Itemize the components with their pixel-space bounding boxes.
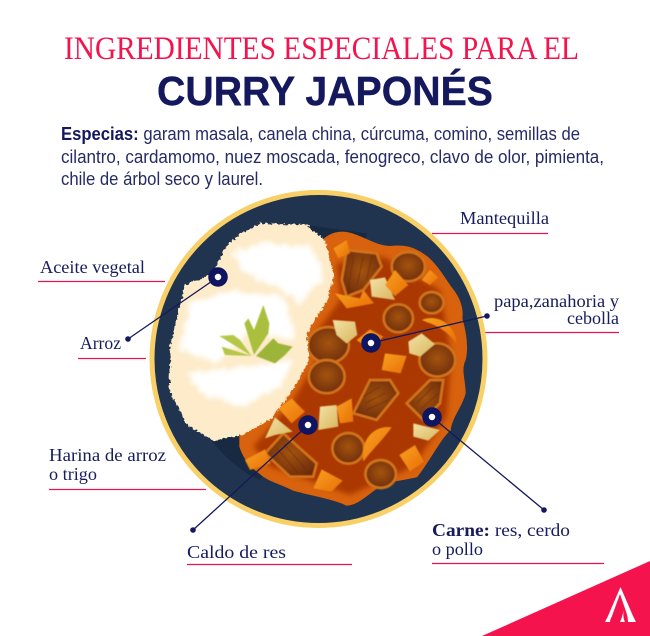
carrot pieces [245,240,457,492]
corner triangle [482,561,650,636]
title line 1: INGREDIENTES ESPECIALES PARA EL [64,31,579,67]
spices text block: cilantro, cardamomo, nuez moscada, fenogreco, clavo de olor, pimienta, [61,147,604,167]
callout marker: carne [426,410,547,513]
label: papa, zanahoria y cebolla: cebolla [567,308,619,328]
curry and rice, drawn in a 3x local grid [169,223,466,505]
label: harina: o trigo [49,464,97,484]
label: aceite vegetal: Aceite vegetal [40,257,145,277]
potato pieces [265,277,440,441]
meat chunks [265,250,455,488]
label: papa, zanahoria y cebolla: papa,zanahoria y [494,291,619,311]
title line 2: CURRY JAPONÉS [157,68,493,114]
meat ribs [277,257,438,473]
icon: parsley garnish [219,305,293,363]
curry details [245,240,457,492]
label: carne: o pollo [432,539,483,559]
icon: logo [605,587,636,622]
label: arroz: Arroz [80,333,121,353]
label lines [38,234,619,564]
spices text block: chile de árbol seco y laurel. [61,169,263,189]
plate shadow [212,225,367,480]
label: harina: Harina de arroz [49,445,166,465]
plate rim [152,192,485,526]
dark sauce [253,257,452,495]
label: carne: Carne: res, cerdo [432,520,570,540]
label: papa, zanahoria y cebolla [494,291,619,328]
plate illustration [152,192,485,526]
label: carne [432,520,570,559]
label: caldo de res: Caldo de res [187,542,286,562]
callout marker: papa [364,313,490,350]
callout marker: caldo [190,418,314,533]
curry sauce [240,232,466,505]
label: harina [49,445,166,484]
callout marker: arroz [125,270,224,342]
spices text block [61,124,604,189]
rice mound [169,223,334,441]
label: mantequilla: Mantequilla [460,208,549,228]
spices text block: Especias: garam masala, canela china, cúrcuma, comino, semillas de [61,124,580,144]
